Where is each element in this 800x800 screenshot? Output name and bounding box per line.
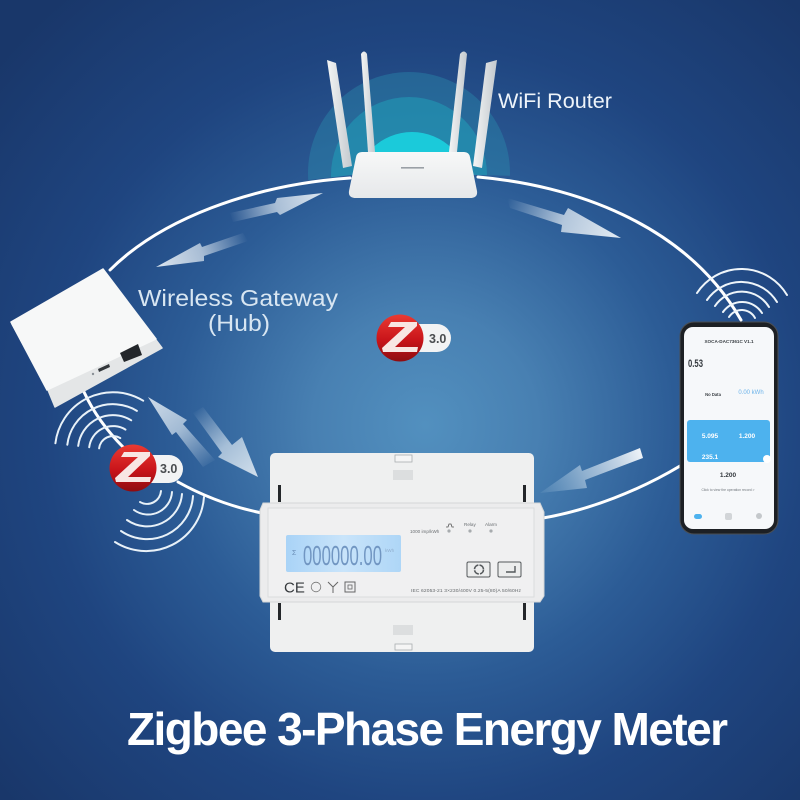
zigbee badge: center: 3.0 bbox=[429, 332, 446, 346]
meter buttons bbox=[467, 562, 521, 577]
app blue card bbox=[687, 420, 771, 463]
phone screen bbox=[684, 327, 774, 529]
phone frame bbox=[680, 322, 778, 534]
hub usb port bbox=[98, 364, 110, 372]
app header: XOCA-DAC7361C V1.1 bbox=[704, 339, 754, 344]
app lower value: 1.200 bbox=[720, 472, 737, 479]
WiFi router bbox=[327, 52, 497, 198]
data flow arrows bbox=[148, 193, 643, 493]
LCD display: kWh bbox=[385, 548, 395, 553]
title: Zigbee 3-Phase Energy Meter bbox=[127, 703, 728, 755]
arrow: gateway to router bbox=[230, 193, 323, 222]
energy meter bbox=[260, 453, 544, 652]
label: Wireless Gateway (Hub): Wireless Gateway bbox=[138, 285, 339, 311]
app blue card: 235.1 bbox=[702, 454, 719, 461]
app bottom nav bbox=[694, 513, 762, 520]
label: Wireless Gateway (Hub) bbox=[138, 285, 339, 336]
hub side face bbox=[12, 324, 162, 407]
LCD display bbox=[286, 535, 401, 572]
app status row: No Data bbox=[705, 392, 722, 397]
wireless gateway hub bbox=[11, 269, 162, 407]
meter upper and lower housing bbox=[270, 453, 534, 652]
app blue card: 1.200 bbox=[739, 433, 756, 440]
LCD display: Σ bbox=[292, 550, 297, 557]
smartphone bbox=[680, 322, 778, 534]
arrow: phone to meter bbox=[540, 448, 643, 493]
wifi arcs near gateway bbox=[55, 392, 143, 448]
arrow: meter to gateway bbox=[148, 397, 215, 467]
zigbee badge: lower left: 3.0 bbox=[160, 462, 177, 476]
router body bbox=[349, 152, 477, 198]
indicator labels: Alarm bbox=[485, 522, 497, 527]
meter side slots bbox=[278, 485, 526, 620]
app link line: Click to view the operation record > bbox=[701, 488, 755, 492]
app reading: 0.53 bbox=[688, 358, 703, 370]
label: Wireless Gateway (Hub): (Hub) bbox=[208, 310, 270, 336]
wifi arcs near zigbee badge bbox=[115, 491, 204, 551]
hub top face bbox=[11, 269, 156, 390]
wifi signal rings bbox=[308, 72, 510, 180]
app status row: 0.00 kWh bbox=[738, 390, 764, 396]
zigbee badge: lower left bbox=[110, 444, 183, 492]
meter front band bbox=[260, 503, 544, 602]
arrow: router to gateway bbox=[156, 233, 248, 267]
spec line: IEC 62053-21 3×230/400V 0.25-5(80)A 50/60Hz bbox=[411, 588, 522, 594]
app blue card: 5.095 bbox=[702, 433, 719, 440]
app status row bbox=[705, 390, 764, 397]
indicator labels bbox=[410, 522, 497, 534]
meter clips bbox=[393, 455, 413, 650]
LCD display: 000000.00 bbox=[303, 540, 382, 571]
wifi arcs above phone bbox=[697, 269, 787, 318]
label: WiFi Router: WiFi Router bbox=[498, 89, 612, 113]
arrow: router to phone bbox=[507, 198, 621, 238]
certification marks bbox=[284, 580, 355, 596]
certification marks: CE bbox=[284, 580, 305, 596]
zigbee badge: center bbox=[376, 314, 451, 362]
indicator labels: Relay bbox=[464, 522, 476, 527]
hub ethernet port bbox=[120, 344, 142, 362]
connection lines bbox=[84, 177, 741, 518]
router antennas bbox=[327, 52, 497, 168]
arrow: gateway to meter bbox=[193, 407, 258, 477]
indicator labels: 1000 imp/kWh bbox=[410, 529, 440, 534]
